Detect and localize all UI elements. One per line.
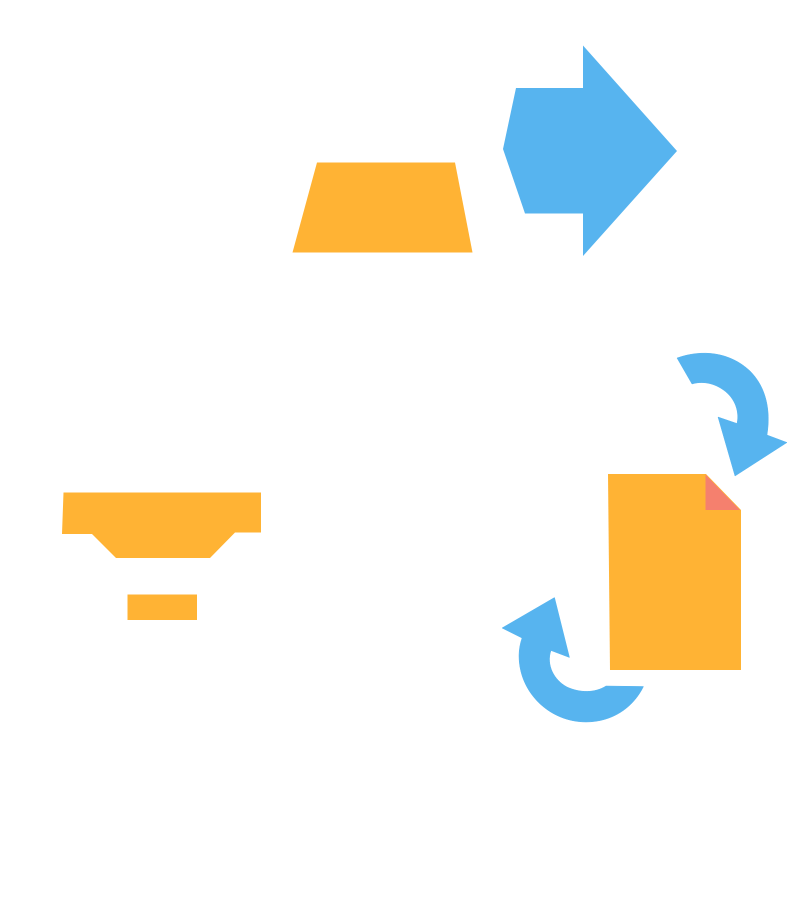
icon: gold funnel lamp [62, 492, 261, 620]
document fold [706, 474, 740, 510]
icon: curved blue arrow bottom left [502, 598, 644, 722]
icon: curved blue arrow top right [677, 353, 787, 476]
arrow: large blue right arrow [503, 46, 677, 256]
icon: gold document with folded corner [608, 474, 741, 670]
icon: gold trapezoid bar [292, 162, 472, 252]
funnel base block [128, 594, 197, 620]
